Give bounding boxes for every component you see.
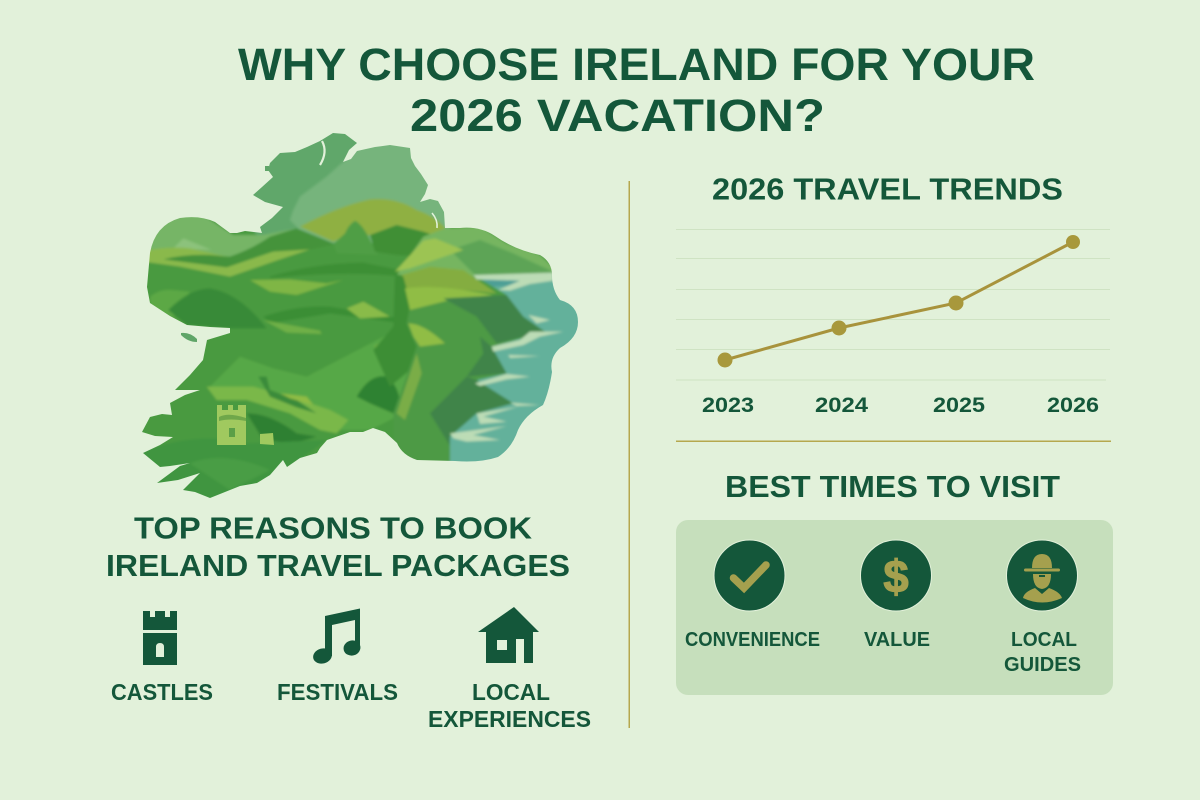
line chart: 2024 (815, 394, 868, 417)
icon: check (714, 540, 785, 611)
heading: top reasons (106, 510, 570, 583)
heading: 2026 travel trends: 2026 TRAVEL TRENDS (712, 172, 1063, 206)
heading: top reasons: TOP REASONS TO BOOK (134, 510, 533, 546)
sea (448, 279, 578, 462)
icon: castle (143, 611, 177, 665)
line chart: 2026 (1047, 394, 1099, 417)
east (397, 227, 560, 277)
castle on map (217, 405, 274, 445)
icon: local guide (1006, 540, 1078, 611)
line chart: 2025 (933, 394, 985, 417)
south hills (212, 338, 406, 430)
islands (181, 166, 269, 342)
label: value: VALUE (864, 628, 930, 651)
title: WHY CHOOSE IRELAND FOR YOUR (238, 39, 1035, 90)
icon: house (478, 607, 539, 663)
divider: vertical (628, 181, 630, 728)
title (238, 39, 1035, 141)
line chart: 2023 (702, 394, 754, 417)
icon: dollar (860, 540, 932, 611)
lough inlets (320, 141, 325, 165)
line chart (676, 230, 1110, 417)
heading: top reasons: IRELAND TRAVEL PACKAGES (106, 548, 570, 583)
icon: dollar: $ (883, 551, 909, 602)
panel: best times (676, 520, 1113, 695)
title: 2026 VACATION? (410, 90, 825, 141)
heading: best times to visit: BEST TIMES TO VISIT (725, 470, 1060, 504)
label: local guides: GUIDES (1004, 653, 1081, 676)
label: local guides: LOCAL (1011, 628, 1077, 651)
label: local experiences: LOCAL (472, 679, 550, 705)
divider: horizontal (676, 440, 1111, 442)
icon: music note (311, 608, 362, 666)
map of Ireland illustrated with landscape (142, 133, 578, 498)
label: local guides (1004, 628, 1081, 676)
label: castles: CASTLES (111, 679, 213, 705)
label: local experiences (428, 679, 591, 732)
label: festivals: FESTIVALS (277, 679, 398, 705)
label: convenience: CONVENIENCE (685, 628, 820, 651)
label: local experiences: EXPERIENCES (428, 706, 591, 732)
